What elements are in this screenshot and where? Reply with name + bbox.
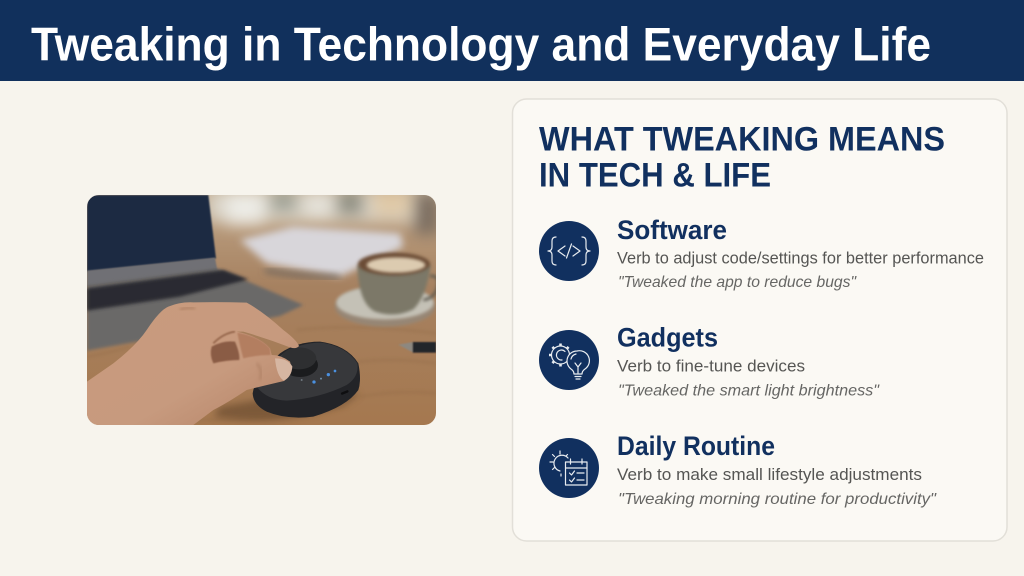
coffee cup and saucer: [335, 253, 438, 327]
photo: hand adjusting a smart dial on a desk: [87, 195, 436, 425]
item: software: [539, 215, 984, 291]
papers: [240, 227, 403, 277]
daily routine text: "Tweaking morning routine for productivity": [618, 491, 938, 508]
panel heading: IN TECH & LIFE: [539, 156, 771, 194]
laptop: [87, 195, 303, 351]
item: gadgets: [539, 322, 881, 400]
wood grain: [87, 327, 436, 420]
gadgets text: "Tweaked the smart light brightness": [618, 382, 881, 400]
daily routine text: Daily Routine: [617, 431, 775, 461]
panel heading: WHAT TWEAKING MEANS: [539, 120, 945, 158]
software text: [617, 215, 984, 291]
wooden desk: [87, 195, 436, 425]
software text: Verb to adjust code/settings for better performance: [617, 248, 984, 268]
header banner: [0, 0, 1024, 81]
software text: "Tweaked the app to reduce bugs": [618, 274, 857, 291]
software text: Software: [617, 215, 727, 245]
pen: [398, 342, 436, 353]
gadgets text: [617, 322, 881, 400]
daily routine text: Verb to make small lifestyle adjustments: [617, 465, 922, 484]
icon: gear and light bulb: [539, 330, 599, 390]
panel heading: [539, 120, 945, 194]
shadow under hand and device: [213, 390, 360, 420]
hand: [87, 302, 299, 425]
icon: code braces: [539, 221, 599, 281]
title: Tweaking in Technology and Everyday Life: [31, 18, 931, 70]
panel: what tweaking means: [512, 99, 1007, 541]
daily routine text: [617, 431, 938, 508]
gadgets text: Verb to fine-tune devices: [617, 356, 805, 376]
icon: sun and calendar: [539, 438, 599, 498]
item: daily routine: [539, 431, 938, 508]
gadgets text: Gadgets: [617, 322, 718, 352]
glasses on the desk: [265, 270, 340, 277]
smart dial device: [253, 342, 360, 418]
blurred cafe background: [207, 190, 440, 235]
